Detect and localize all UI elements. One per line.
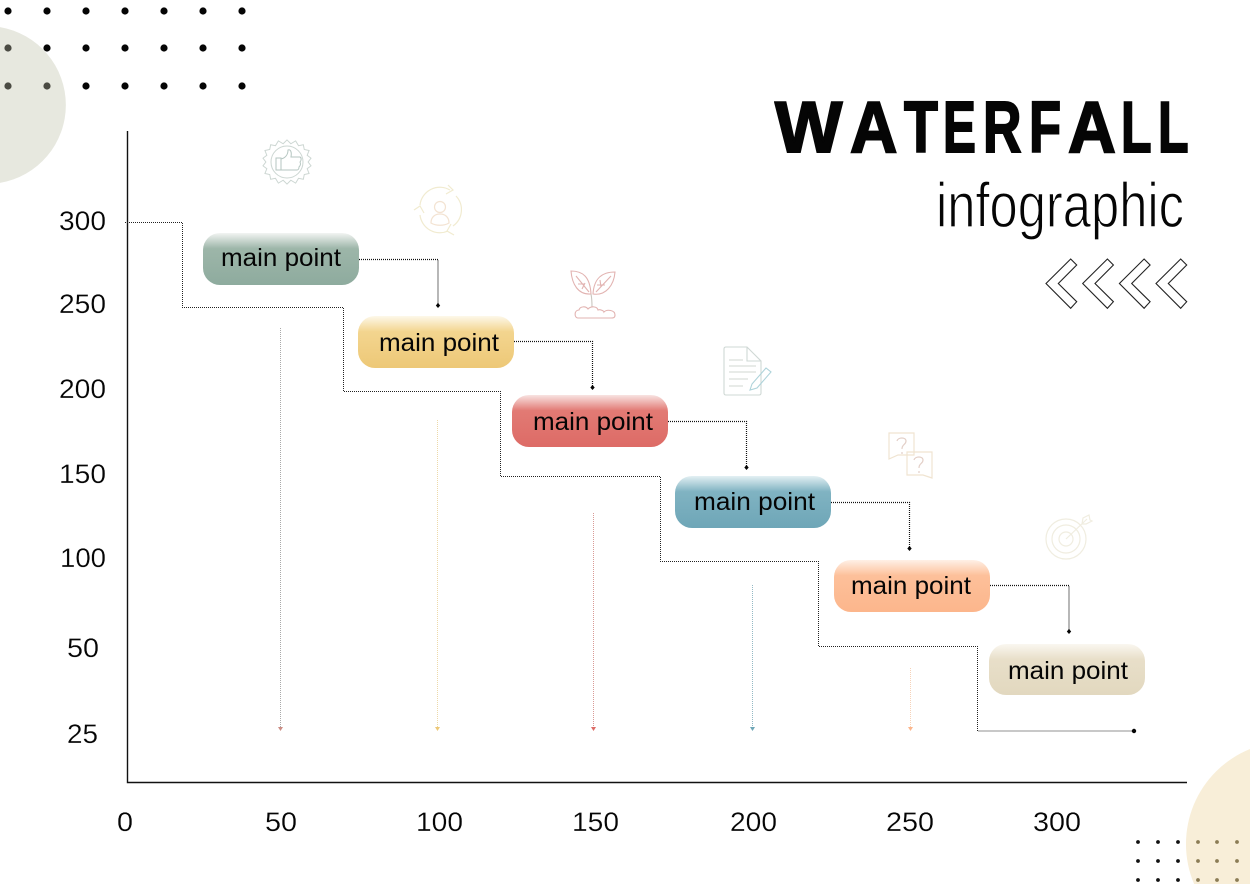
y axis labels: 150 <box>59 459 106 489</box>
point 4: blue pill: main point <box>694 488 815 516</box>
y axis labels: 250 <box>59 289 106 319</box>
title: A <box>1068 88 1116 168</box>
icon: sprout on cloud <box>571 271 615 318</box>
y axis labels <box>59 206 106 749</box>
y axis labels: 25 <box>67 719 98 749</box>
title: F <box>1029 88 1061 168</box>
point 6: beige pill: main point <box>1008 657 1128 685</box>
point 1: green pill: main point <box>221 244 341 272</box>
title: L <box>1121 88 1152 168</box>
icon: thumbs up badge <box>263 140 311 184</box>
title <box>774 88 1189 168</box>
point 1: green pill <box>203 233 359 285</box>
x axis labels: 50 <box>265 807 297 837</box>
decorative circle and dots: bottom right <box>1136 749 1250 884</box>
point 3: red pill: main point <box>533 408 653 436</box>
x axis labels <box>117 807 1081 837</box>
icon: question speech bubbles <box>889 433 932 478</box>
connector arrows between points <box>359 260 1071 634</box>
title: E <box>943 88 976 168</box>
chart axes <box>128 131 1187 782</box>
x axis labels: 100 <box>416 807 463 837</box>
icon: document with pencil <box>724 347 771 395</box>
decorative circle: top left <box>0 27 66 183</box>
title: A <box>850 88 897 168</box>
x axis labels: 0 <box>117 807 133 837</box>
y axis labels: 50 <box>67 633 99 663</box>
icon: target with arrow <box>1046 515 1092 559</box>
x axis labels: 300 <box>1033 807 1081 837</box>
point 3: red pill <box>512 395 668 447</box>
title: W <box>775 88 842 168</box>
y axis labels: 100 <box>60 543 106 573</box>
y axis labels: 200 <box>59 374 106 404</box>
decorative dot grid: top left <box>4 7 246 90</box>
point 5: peach pill <box>834 560 990 612</box>
y axis labels: 300 <box>59 206 106 236</box>
chevron arrows <box>1046 259 1187 308</box>
icon: person with cycle arrows <box>414 185 461 235</box>
point 2: yellow pill <box>358 316 514 368</box>
point 5: peach pill: main point <box>851 572 971 600</box>
x axis labels: 200 <box>730 807 777 837</box>
subtitle: infographic <box>936 171 1184 241</box>
waterfall step line <box>125 222 1136 733</box>
point 6: beige pill <box>989 644 1145 695</box>
title: L <box>1158 88 1189 168</box>
x axis labels: 250 <box>886 807 934 837</box>
title: T <box>904 88 938 168</box>
vertical drop lines with small arrows <box>278 328 913 731</box>
point 2: yellow pill: main point <box>379 329 499 357</box>
point 4: blue pill <box>675 476 831 528</box>
x axis labels: 150 <box>572 807 619 837</box>
title: R <box>983 88 1022 168</box>
